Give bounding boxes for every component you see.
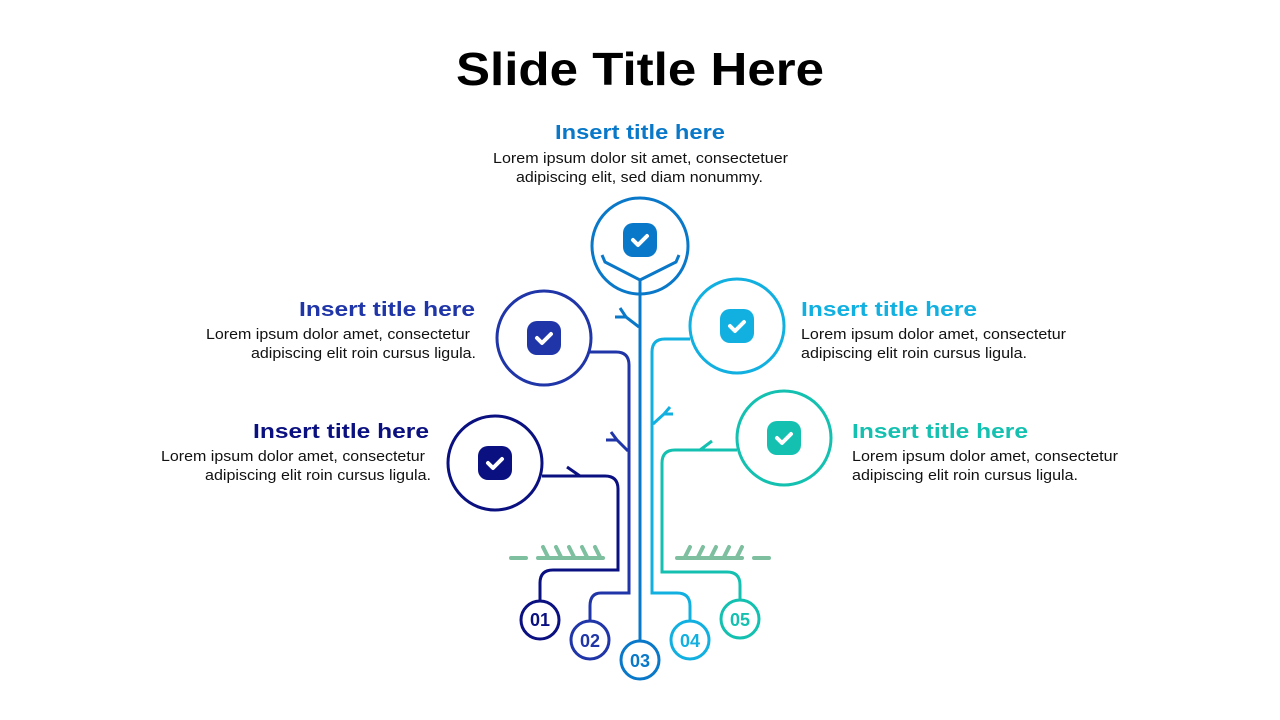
text block: 02 <box>206 299 476 362</box>
text block: top (03): Lorem ipsum dolor sit amet, consectetuer <box>493 150 788 167</box>
grass <box>511 547 769 558</box>
branch 05 <box>662 391 831 638</box>
number labels <box>530 610 750 671</box>
branch 02 <box>497 291 629 659</box>
title: Slide Title Here <box>456 43 824 95</box>
text block: 05: Insert title here <box>852 421 1028 443</box>
text block: top (03): Insert title here <box>555 122 725 144</box>
text block: 02: Insert title here <box>299 299 475 321</box>
branch 03 trunk <box>592 198 688 679</box>
text block: 02: Lorem ipsum dolor amet, consectetur <box>206 326 470 343</box>
text block: 04: Lorem ipsum dolor amet, consectetur <box>801 326 1066 343</box>
text block: 04 <box>801 299 1066 362</box>
text block: 01: Lorem ipsum dolor amet, consectetur <box>161 448 425 465</box>
number labels: 02 <box>580 631 600 651</box>
icon: check 04 <box>720 309 754 343</box>
icon: check 03 <box>623 223 657 257</box>
text block: 04: adipiscing elit roin cursus ligula. <box>801 345 1027 362</box>
icon: check 05 <box>767 421 801 455</box>
branch 01 <box>448 416 618 639</box>
text block: 04: Insert title here <box>801 299 977 321</box>
branch 04 <box>652 279 784 659</box>
text block: 05 <box>852 421 1118 484</box>
text block: top (03) <box>493 122 788 186</box>
number labels: 04 <box>680 631 700 651</box>
number labels: 03 <box>630 651 650 671</box>
text block: 01: Insert title here <box>253 421 429 443</box>
text block: top (03): adipiscing elit, sed diam nonummy. <box>516 169 763 186</box>
text block: 05: adipiscing elit roin cursus ligula. <box>852 467 1078 484</box>
text block: 01 <box>161 421 431 484</box>
number labels: 05 <box>730 610 750 630</box>
icon: check 01 <box>478 446 512 480</box>
text block: 02: adipiscing elit roin cursus ligula. <box>251 345 476 362</box>
text block: 01: adipiscing elit roin cursus ligula. <box>205 467 431 484</box>
number labels: 01 <box>530 610 550 630</box>
text block: 05: Lorem ipsum dolor amet, consectetur <box>852 448 1118 465</box>
icon: check 02 <box>527 321 561 355</box>
